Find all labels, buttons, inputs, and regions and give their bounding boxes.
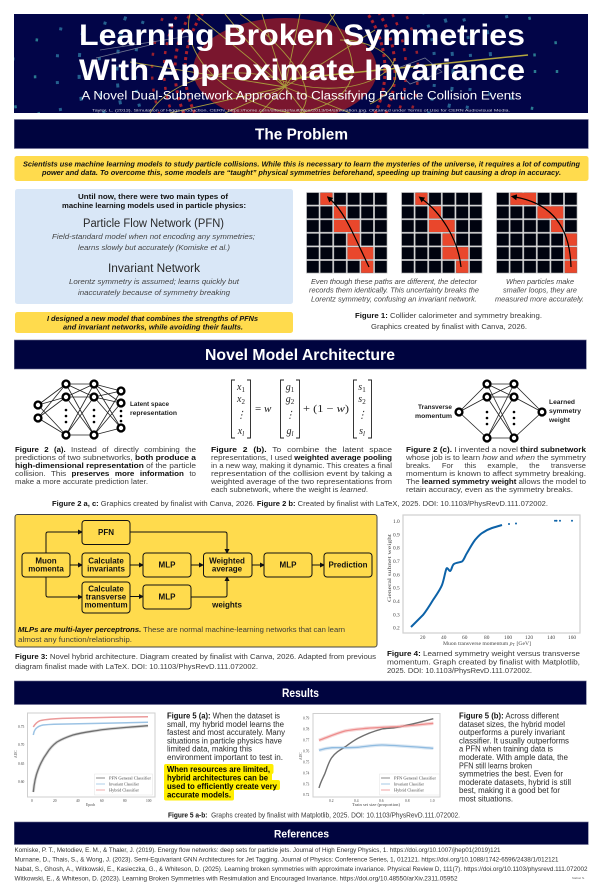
figure 4: symmetry weight chart: 80 (484, 635, 490, 641)
invariant network: inaccurately because of symmetry breaking (78, 288, 230, 297)
flow labels: MLP (159, 560, 176, 570)
heading: novel model architecture (14, 340, 586, 369)
heading: references: References (274, 828, 329, 840)
figure 5a: auc vs epoch chart: AUC (14, 750, 18, 758)
figure 4: symmetry weight chart (387, 515, 580, 647)
figure 1: calorimeter grid c (496, 192, 578, 274)
subtitle: A Novel Dual-Subnetwork Approach to Classifying Particle Collision Events (82, 90, 522, 102)
figure 2b: weighted average equation: 1 (362, 386, 366, 394)
flow labels: Prediction (328, 560, 368, 570)
figure 2b: weighted average equation: x (237, 382, 241, 393)
invariant network (69, 263, 240, 297)
figure 4: symmetry weight chart: 40 (441, 635, 447, 641)
figure 4: symmetry weight chart: 0.6 (393, 572, 400, 578)
figure 5b: auc vs dataset size chart: Hybrid Classifier (394, 788, 425, 792)
figure 4: symmetry weight chart: 0.9 (393, 532, 400, 538)
figure 2c: symmetry weight network: Learned (549, 400, 575, 406)
figure 2b: weighted average equation: s (358, 394, 362, 405)
figure 2b: weighted average equation: x (238, 426, 242, 437)
figure 2b: weighted average equation: g (286, 382, 291, 393)
flow labels (28, 528, 368, 610)
figure 5a text (167, 712, 285, 762)
figure 5b: auc vs dataset size chart: 0.78 (303, 728, 309, 732)
figure 5b text: best, making it a good bet for (459, 786, 560, 795)
panel intro (62, 192, 246, 210)
figure 5a: auc vs epoch chart: 60 (100, 799, 104, 803)
figure 4: symmetry weight chart: 20 (420, 635, 426, 641)
figure 4 caption (387, 649, 580, 675)
panel intro: machine learning models used in particle physics: (62, 201, 246, 210)
flow labels: Calculate (88, 556, 124, 566)
references list (14, 847, 588, 882)
particle flow network: learns slowly but accurately (Komiske et al.) (78, 243, 230, 252)
figure 5b: auc vs dataset size chart: AUC (299, 752, 303, 760)
particle flow network (52, 218, 255, 252)
panel intro: Until now, there were two main types of (78, 192, 229, 201)
grid note: identical paths: Even though these paths are different, the detector (311, 277, 478, 286)
figure 2b caption: in a new way, making it dynamic. This creates a final (211, 461, 392, 470)
figure 2c: symmetry weight network: symmetry (549, 409, 582, 415)
figure 2b: weighted average equation: s (359, 426, 363, 437)
figure 2b: weighted average equation: x (237, 394, 241, 405)
figure 2b: weighted average equation: l (242, 430, 244, 438)
figure 2b caption: weighted average of the two representations from (210, 477, 392, 486)
invariant network: Invariant Network (108, 263, 200, 275)
figure 5a: auc vs epoch chart: Hybrid Classifier (109, 788, 140, 792)
callout: key finding highlight: When resources are limited, (167, 765, 270, 774)
figure 4: symmetry weight chart: Muon transverse momentum p (443, 641, 512, 647)
title: Learning Broken Symmetries (79, 19, 525, 52)
figure 5b: auc vs dataset size chart: 0.73 (303, 782, 309, 786)
figure 4 caption: 2025. DOI: 10.1103/PhysRevD.111.072002. (387, 666, 532, 675)
mlp note: MLPs are multi-layer perceptrons. These are normal machine-learning networks that can learn (18, 625, 345, 634)
figure 5a: auc vs epoch chart: 0.65 (18, 762, 24, 766)
figure 2a caption: make a more accurate prediction later. (15, 477, 148, 486)
callout: problem summary: power and data. To overcome this, some models are “taught” physical symmetries beforehand, speeding up training but causing a drop in accuracy. (41, 168, 561, 177)
figure 5 source note: Figure 5 a-b: Graphs created by finalist with Matplotlib, 2025. DOI: 10.1103/PhysRevD.111.072002. (168, 810, 460, 820)
figure 5b: auc vs dataset size chart: 0.75 (303, 760, 309, 764)
figure 4: symmetry weight chart: General subnet weight (387, 533, 393, 602)
figure 4 caption: Figure 4: Learned symmetry weight versus transverse (387, 649, 580, 658)
figure 2c caption: whose job is to learn how and when the symmetry (405, 453, 586, 462)
figure 4: symmetry weight chart: 60 (462, 635, 468, 641)
grid note: smaller loops: When particles make (506, 277, 574, 286)
figure 2b: weighted average equation (232, 380, 372, 438)
figure 1 caption: Figure 1: Collider calorimeter and symmetry breaking. (355, 311, 542, 320)
figure 2b: weighted average equation: 1 (291, 386, 295, 394)
figure 5a: auc vs epoch chart: 0.75 (18, 725, 24, 729)
flow labels: Calculate (88, 584, 124, 594)
references list: Witkowski, E., & Whiteson, D. (2023). Learning Broken Symmetries with Resimulation and Encouraged Invariance. https://doi.org/10.48550/arXiv.2311.05952 (14, 876, 458, 882)
figure 2b caption (210, 445, 393, 494)
figure 5b: auc vs dataset size chart: 0.2 (329, 799, 334, 803)
flow labels: momenta (28, 564, 64, 574)
callout: key finding highlight: accurate models. (167, 790, 231, 800)
figure 5b: auc vs dataset size chart: 0.4 (354, 799, 359, 803)
figure 5b: auc vs dataset size chart: Invariant Classifier (394, 782, 425, 786)
particle flow network: Particle Flow Network (PFN) (83, 218, 224, 230)
figure 5b text: Figure 5 (b): Across different (459, 712, 560, 720)
figure 5b text: symmetries the best. Even for (459, 770, 563, 779)
mlp note: almost any function/relationship. (18, 635, 132, 644)
figure 4: symmetry weight chart: 100 (504, 635, 512, 641)
figure 2b: weighted average equation: g (287, 426, 292, 437)
panel: model types (15, 189, 293, 304)
figure 5a: auc vs epoch chart: 20 (53, 799, 57, 803)
figure 5b text: moderate. With ample data, the (459, 753, 569, 762)
figure 1: calorimeter grid b (401, 192, 483, 274)
callout: key finding highlight: used to efficiently create very (167, 782, 278, 791)
figure 2c caption: The learned symmetry weight allows the model to (406, 477, 586, 486)
figure 2b: weighted average equation: ⋮ (236, 410, 246, 421)
callout: key finding highlight (164, 764, 280, 800)
figure 4: symmetry weight chart: 0.2 (393, 626, 400, 632)
figure 2b: weighted average equation: 1 (241, 386, 245, 394)
title (79, 19, 525, 87)
figure 5a: auc vs epoch chart: Epoch (86, 803, 95, 807)
figure 4: symmetry weight chart: T (513, 642, 516, 647)
figure 2c: symmetry weight network: momentum (415, 414, 452, 420)
figure 5b: auc vs dataset size chart (299, 714, 440, 807)
figure 5a: auc vs epoch chart: PFN General Classifier (109, 776, 152, 780)
figure 5b text: most situations. (459, 794, 513, 804)
figure 2b caption: representations, I used weighted average pooling (211, 453, 393, 462)
figure 2b: weighted average equation: = w (255, 403, 272, 415)
invariant network: Lorentz symmetry is assumed; learns quickly but (69, 277, 240, 286)
image credit: Taylor, L. (2013). Simulation of Higgs production. CERN. https://home.cern/sites/default/files/2013/04/simulation.jpg. Obtained under Terms of Use for CERN Audiovisual Media. (92, 108, 510, 112)
heading: the problem (14, 120, 588, 148)
figure 5a: auc vs epoch chart: 0 (31, 799, 33, 803)
figure 5a text: fastest and most accurately. Many (167, 728, 285, 737)
figure 2c: symmetry weight network: Transverse (418, 405, 453, 411)
figure 5b: auc vs dataset size chart: 0.79 (303, 716, 309, 720)
figure 4: symmetry weight chart: 0.4 (393, 599, 400, 605)
flow labels: Weighted (209, 556, 245, 566)
figure 1: calorimeter grid a (306, 192, 388, 274)
figure 5b text: outperforms a purely invariant (459, 728, 566, 737)
particle flow network: Field-standard model when not encoding any symmetries; (52, 232, 255, 241)
figure 2b: weighted average equation: l (292, 430, 294, 438)
callout: new model: I designed a new model that combines the strengths of PFNs (47, 314, 258, 323)
figure 5b text (459, 712, 571, 804)
figure 2c caption: momentum is known to affect symmetry breaking. (406, 469, 586, 478)
figure 5b: auc vs dataset size chart: 0.76 (303, 750, 309, 754)
figure 5a: auc vs epoch chart: 0.70 (18, 743, 24, 747)
figure 2c: symmetry weight network (415, 381, 582, 441)
callout: problem summary (14, 156, 588, 181)
figure 2b: weighted average equation: ⋮ (285, 410, 295, 421)
heading: results (14, 681, 586, 704)
flow labels: invariants (87, 564, 125, 574)
flow labels: momentum (84, 600, 128, 610)
title: With Approximate Invariance (79, 54, 525, 87)
figure 2b: weighted average equation: 2 (362, 398, 366, 406)
figure 2a: latent network diagram (35, 381, 177, 438)
figure 5b text: dataset sizes, the hybrid model (459, 720, 565, 729)
figure 2a caption: collision. This preserves more information to (15, 469, 196, 478)
figure 5b text: a PFN when training data is (459, 745, 553, 754)
figure 5a: auc vs epoch chart: 100 (146, 799, 152, 803)
figure 1 caption: Graphics created by finalist with Canva, 2026. (371, 322, 527, 331)
figure 2a caption: predictions of two subnetworks, both produce a (15, 453, 197, 462)
flow arrows (46, 532, 324, 597)
figure 2c caption: retain accuracy, even as the symmetry breaks. (406, 485, 573, 494)
figure 2b: weighted average equation: s (358, 382, 362, 393)
figure 4: symmetry weight chart: 120 (525, 635, 533, 641)
figure 5b: auc vs dataset size chart: PFN General Classifier (394, 776, 437, 780)
figure 5b: auc vs dataset size chart: 0.8 (405, 799, 410, 803)
figure 2b: weighted average equation: 2 (241, 398, 245, 406)
figure 3 caption: Figure 3: Novel hybrid architecture. Diagram created by finalist with Canva, 2026. Adapted from previous (15, 652, 376, 661)
grid note: smaller loops: measured more accurately. (495, 294, 584, 303)
figure 4: symmetry weight chart: 0.3 (393, 612, 400, 618)
callout: problem summary: Scientists use machine learning models to study particle collisions. While this is necessary to learn the mysteries of the universe, it requires a lot of computing (23, 160, 580, 168)
figure 5b text: moderate datasets, hybrid is still (459, 778, 571, 787)
figure 2a: latent network diagram: representation (130, 411, 177, 417)
figure 5b: auc vs dataset size chart: 0.72 (303, 793, 309, 797)
figure 5a text: small, my hybrid model learns the (167, 720, 285, 729)
figure 2 source note: Figure 2 a, c: Graphics created by finalist with Canva, 2026. Figure 2 b: Created by finalist with LaTeX, 2025. DOI: 10.1103/PhysRevD.111.072002. (52, 499, 548, 508)
figure 2b: weighted average equation: + (1 − w) (303, 403, 349, 415)
figure 2c caption: Figure 2 (c). I invented a novel third subnetwork (406, 445, 587, 454)
figure 2b: weighted average equation: 2 (291, 398, 295, 406)
figure 5a: auc vs epoch chart: 0.60 (18, 780, 24, 784)
figure 4: symmetry weight chart: [GeV] (515, 641, 531, 647)
grid note: identical paths: Lorentz symmetry, confusing an invariant network. (311, 294, 477, 303)
figure 2a: latent network diagram: Latent space (130, 402, 170, 408)
figure 5b: auc vs dataset size chart: 1.0 (430, 799, 435, 803)
figure 5b text: PFN still learns broken (459, 761, 532, 770)
flow labels: average (212, 564, 243, 574)
flow labels: Muon (35, 556, 57, 566)
figure 5a: auc vs epoch chart: Invariant Classifier (109, 782, 140, 786)
figure 4: symmetry weight chart: 160 (568, 635, 576, 641)
references list: Komiske, P. T., Metodiev, E. M., & Thaler, J. (2019). Energy flow networks: deep sets for particle jets. Journal of High Energy Physics, 1. https://doi.org/10.1007/jhep01(2019)121 (14, 847, 501, 854)
grid note: identical paths (309, 277, 479, 303)
grid note: smaller loops: smaller loops, they are (503, 286, 577, 295)
mlp note (18, 625, 345, 644)
figure 2b caption: each subnetwork, where the weight is learned. (211, 485, 368, 494)
heading: the problem: The Problem (255, 126, 348, 144)
references list: Nabat, S., Ghosh, A., Witkowski, E., Kasieczka, G., & Whiteson, D. (2025). Learning broken symmetries with approximate invariance. Physical Review D, 111(7). https://doi.org/10.1103/physrevd.111.072002 (14, 866, 588, 873)
figure 2c caption: breaks. For this example, the transverse (406, 461, 586, 470)
figure 4: symmetry weight chart: 0.7 (393, 559, 400, 565)
finalist mark: Nabat S. (572, 876, 585, 880)
figure 2b: weighted average equation: ⋮ (357, 410, 367, 421)
panel: hybrid architecture flow diagram (15, 514, 377, 647)
flow labels: weights (211, 600, 242, 610)
figure 2c caption (405, 445, 587, 494)
callout: new model: and invariant networks, while avoiding their faults. (63, 322, 243, 332)
figure 4: symmetry weight chart: 1.0 (393, 519, 400, 525)
figure 5b text: classifier. It usually outperforms (459, 736, 569, 745)
grid note: smaller loops (495, 277, 584, 303)
figure 2b caption: representation of the collision event by taking a (211, 469, 393, 478)
callout: new model (15, 312, 293, 333)
figure 5a: auc vs epoch chart: 80 (123, 799, 127, 803)
header banner (14, 14, 588, 113)
flow boxes (22, 520, 372, 613)
figure 5a text: limited data, making this (167, 745, 252, 754)
heading: references (14, 822, 588, 844)
figure 2b: weighted average equation: l (363, 430, 365, 438)
figure 4: symmetry weight chart: 0.5 (393, 586, 400, 592)
figure 5a text: Figure 5 (a): When the dataset is (167, 712, 280, 720)
figure 5b: auc vs dataset size chart: 0.74 (303, 772, 309, 776)
figure 2c: symmetry weight network: weight (548, 418, 570, 424)
figure 5b: auc vs dataset size chart: Train set size (proportion) (352, 803, 401, 807)
flow labels: PFN (98, 528, 114, 537)
figure 3 caption (15, 652, 376, 671)
figure 5b: auc vs dataset size chart: 0.77 (303, 738, 309, 742)
flow labels: MLP (280, 560, 297, 570)
heading: results: Results (282, 686, 319, 700)
figure 2a caption (15, 445, 197, 486)
figure 5a: auc vs epoch chart (14, 713, 155, 807)
figure 4: symmetry weight chart: 0.8 (393, 546, 400, 552)
figure 2b: weighted average equation: g (286, 394, 291, 405)
figure 2b caption: Figure 2 (b). To combine the latent space (211, 445, 392, 454)
figure 2a caption: high-dimensional representation of the particle (15, 461, 196, 470)
heading: novel model architecture: Novel Model Architecture (205, 347, 395, 364)
figure 5a text: situations in particle physics have (167, 736, 283, 745)
flow labels: MLP (159, 592, 176, 602)
figure 5a text: environment important to test in. (167, 753, 283, 762)
figure 1 caption (355, 311, 542, 331)
callout: key finding highlight: hybrid architectures can be (167, 774, 269, 782)
figure 4 caption: momentum. Graph created by finalist with Matplotlib, (387, 658, 580, 666)
flow labels: transverse (86, 592, 127, 602)
figure 5b: auc vs dataset size chart: 0.6 (379, 799, 384, 803)
figure 3 caption: diagram finalist made with LaTeX. DOI: 10.1103/PhysRevD.111.072002. (15, 662, 258, 671)
references list: Murnane, D., Thais, S., & Wong, J. (2023). Semi-Equivariant GNN Architectures for Jet Tagging. Journal of Physics: Conference Series, 1, 012121. https://doi.org/10.1088/1742-6596/2438/1/012121 (14, 856, 559, 864)
figure 4: symmetry weight chart: 140 (547, 635, 555, 641)
figure 5a: auc vs epoch chart: 40 (76, 799, 80, 803)
figure 2a caption: Figure 2 (a). Instead of directly combining the (15, 445, 196, 454)
grid note: identical paths: records them identically. This uncertainty breaks the (309, 286, 479, 295)
